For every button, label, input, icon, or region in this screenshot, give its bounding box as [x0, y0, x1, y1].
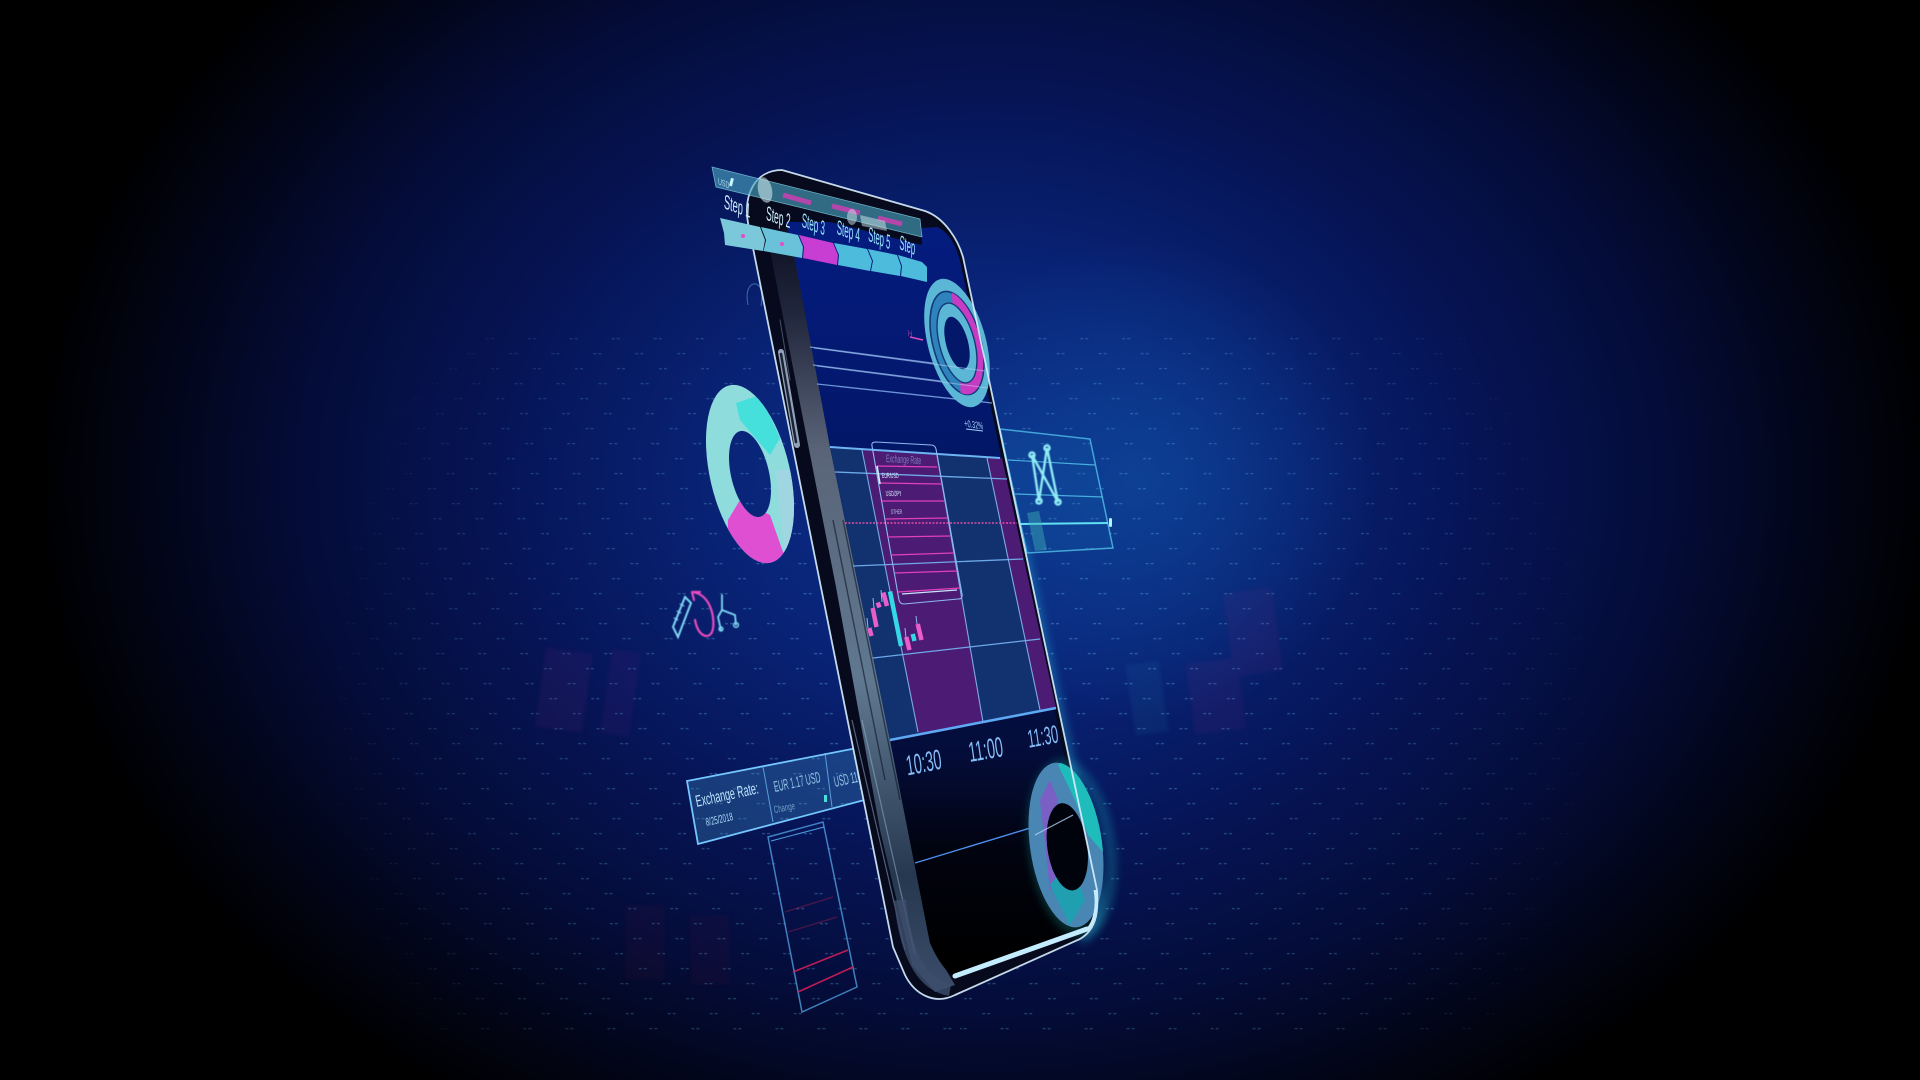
- bottom edge highlight: [955, 890, 1096, 976]
- stock chart area: [830, 447, 1056, 740]
- phone screen: [786, 222, 1094, 977]
- step labels: Step 3: [801, 210, 825, 241]
- lower price line: [915, 815, 1073, 863]
- phone body: [747, 170, 1097, 999]
- panel: right floating line chart: [1000, 429, 1113, 553]
- exchange rate list card: USD/JPY: [885, 491, 902, 499]
- panel: exchange rate ticker: Change: [773, 799, 796, 815]
- step labels: Step 5: [868, 224, 891, 255]
- small phone outline: [768, 822, 857, 1012]
- phone: glow: [1020, 540, 1097, 939]
- step labels: [723, 192, 916, 260]
- panel: exchange rate ticker: USD 110: [832, 767, 863, 791]
- time axis labels: 10:30: [904, 743, 943, 782]
- ring chart: top right of screen: [814, 272, 1002, 414]
- icons: ruler, loop arrow, network tree: [673, 592, 738, 637]
- dotted perspective grid: [300, 330, 1600, 1030]
- step labels: Step 2: [766, 203, 791, 233]
- faint circle outline: [747, 284, 762, 306]
- ticker strip above phone: USD: [718, 176, 730, 191]
- icon: N shaped line plot: [1029, 445, 1061, 505]
- candlesticks: [867, 590, 922, 650]
- side button: [780, 320, 797, 445]
- exchange rate list card: OTHER: [890, 509, 903, 517]
- price lines upper section: [810, 347, 992, 403]
- donut chart: bottom right of screen: [1024, 756, 1120, 940]
- chevron step bar: [720, 218, 927, 282]
- donut chart: left floating: [706, 384, 794, 564]
- small magenta marker: [910, 337, 923, 340]
- exchange rate list card: [872, 442, 962, 604]
- time axis labels: 11:00: [967, 731, 1005, 768]
- step labels: Step: [899, 232, 916, 260]
- panel: exchange rate ticker: 8/25/2018: [705, 810, 734, 828]
- time axis labels: 11:30: [1026, 721, 1060, 754]
- step labels: Step 1: [723, 192, 751, 223]
- ticker strip above phone: [712, 167, 922, 237]
- glass outline: [747, 170, 1097, 999]
- faint background candlesticks: [535, 587, 1284, 985]
- exchange rate list card: Exchange Rate: [886, 452, 921, 467]
- label: exchange rate: Exchange Rate:: [694, 779, 760, 810]
- metal side strip: [768, 222, 955, 992]
- time axis labels: [904, 721, 1060, 782]
- exchange rate list card: EUR/USD: [881, 473, 899, 481]
- percentage label: +0.32%: [964, 418, 984, 432]
- step labels: Step 4: [836, 217, 861, 248]
- panel: exchange rate ticker: [687, 748, 872, 844]
- phone screen: H: [907, 328, 913, 340]
- panel: exchange rate ticker: EUR 1.17 USD: [772, 768, 822, 796]
